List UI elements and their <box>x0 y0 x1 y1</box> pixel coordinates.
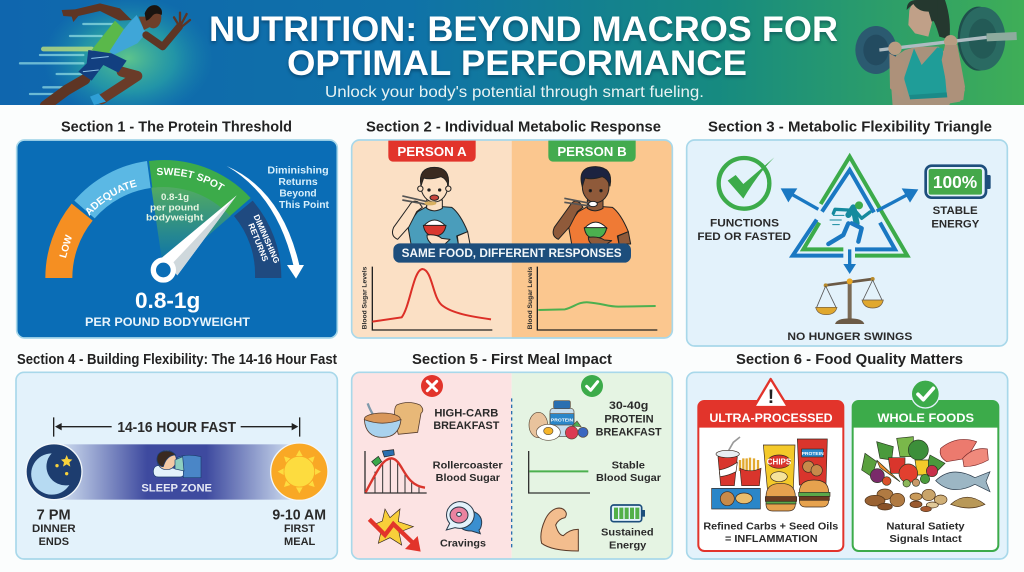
annotation: diminishing returns: Diminishing <box>267 165 329 176</box>
label: rollercoaster blood sugar: Blood Sugar <box>436 473 500 484</box>
chart: person A blood sugar spike: Blood Sugar Levels <box>362 266 369 329</box>
icon: vegetables <box>862 437 945 487</box>
icon: burgers <box>765 480 830 511</box>
label: protein breakfast <box>596 400 662 438</box>
label: stable blood sugar <box>596 460 661 484</box>
panel: protein threshold gauge <box>16 139 338 339</box>
label: protein breakfast: 30-40g <box>609 400 648 412</box>
icon: meat <box>940 439 988 467</box>
tag: person A: PERSON A <box>397 144 467 159</box>
figure: person A eating <box>392 167 470 244</box>
annotation: diminishing returns: Returns <box>278 177 318 188</box>
icon: moon <box>26 444 82 500</box>
icon: stable chart <box>529 451 590 493</box>
gauge needle <box>153 195 237 280</box>
panel: 14-16 hour fast timeline <box>16 372 337 559</box>
gauge segment: sweet spot: SWEET SPOT <box>156 168 225 190</box>
span arrow <box>54 417 300 437</box>
photo: sprinter <box>20 3 190 106</box>
tag: person B <box>548 141 636 162</box>
label: 7 PM dinner ends <box>32 508 76 548</box>
title: OPTIMAL PERFORMANCE <box>287 44 747 83</box>
card: ultra-processed: ULTRA-PROCESSED <box>709 411 833 425</box>
icon: warning triangle <box>754 379 788 408</box>
heading: section 3: Section 3 - Metabolic Flexibility Triangle <box>708 120 992 136</box>
label: refined carbs <box>703 521 839 545</box>
label: stable energy <box>931 205 980 230</box>
tag: person B: PERSON B <box>557 144 627 159</box>
icon: donut speech bubbles <box>446 502 482 534</box>
card: whole foods: WHOLE FOODS <box>877 411 974 425</box>
icon: soda and fries <box>716 437 761 486</box>
heading: section 2: Section 2 - Individual Metabolic Response <box>366 120 661 136</box>
label: natural satiety: Signals Intact <box>889 534 962 545</box>
label: high-carb breakfast: BREAKFAST <box>433 420 500 432</box>
gauge segment: diminishing returns: DIMINISHING <box>252 213 282 265</box>
header banner <box>0 0 1024 105</box>
icon: warning triangle: ! <box>768 387 774 408</box>
triangle with arrows <box>781 157 918 274</box>
sweet spot range text: 0.8-1g <box>161 192 189 202</box>
label: stable blood sugar: Blood Sugar <box>596 473 661 484</box>
icon: eggs protein jar berries: PROTEIN <box>551 418 573 424</box>
label: protein breakfast: BREAKFAST <box>596 426 662 438</box>
label: refined carbs: Refined Carbs + Seed Oils <box>703 521 839 532</box>
tag: person A <box>388 141 476 162</box>
chart: person A blood sugar spike <box>362 266 492 330</box>
icon: battery full <box>611 505 645 522</box>
label: natural satiety <box>886 521 965 545</box>
gauge inner sector <box>151 187 231 260</box>
heading: section 6: Section 6 - Food Quality Matters <box>736 352 963 368</box>
heading: section 5: Section 5 - First Meal Impact <box>412 352 612 368</box>
label: natural satiety: Natural Satiety <box>886 521 965 532</box>
label: 9-10 AM first meal: 9-10 AM <box>272 508 326 524</box>
label: stable energy: STABLE <box>933 205 978 217</box>
gauge segment: adequate <box>74 161 151 218</box>
icon: battery 100%: 100% <box>933 172 977 192</box>
label: 7 PM dinner ends: 7 PM <box>37 508 71 524</box>
icon: flexed arm <box>541 508 578 551</box>
label: sustained energy: Energy <box>609 540 647 551</box>
label: rollercoaster blood sugar <box>433 460 503 484</box>
banner: same food: SAME FOOD, DIFFERENT RESPONSES <box>402 246 622 260</box>
icon: battery 100% <box>926 166 991 198</box>
icon: crash arrow burst <box>369 509 421 552</box>
label: 9-10 AM first meal: MEAL <box>284 536 316 548</box>
photo: woman lifting barbell <box>855 0 1017 107</box>
label: sustained energy <box>601 527 654 551</box>
value: 0.8-1g: 0.8-1g <box>135 288 200 313</box>
sweet spot range text: per pound <box>150 202 199 212</box>
icon: cereal and toast <box>364 402 423 437</box>
icon: check circle <box>719 157 774 209</box>
chart: person B stable blood sugar: Blood Sugar Levels <box>527 266 534 329</box>
banner: same food <box>393 243 631 263</box>
icon: chips bag: CHIPS <box>767 458 792 467</box>
label: cravings: Cravings <box>440 538 486 549</box>
panel: food quality matters <box>687 372 1008 559</box>
gauge segment: diminishing returns: RETURNS <box>246 222 271 263</box>
icon: X badge <box>421 375 443 397</box>
heading: section 1: Section 1 - The Protein Threshold <box>61 120 292 136</box>
icon: snack bar <box>712 488 760 509</box>
label: 7 PM dinner ends: ENDS <box>39 536 69 548</box>
label: protein breakfast: PROTEIN <box>604 413 654 425</box>
gauge segment: low: LOW <box>58 233 75 259</box>
gauge segment: sweet spot <box>149 160 250 216</box>
panel: individual metabolic response <box>352 140 672 338</box>
figure: person B eating <box>553 167 631 244</box>
title <box>210 16 838 79</box>
label: 9-10 AM first meal <box>272 508 326 548</box>
icon: sun <box>271 443 328 500</box>
icon: fish <box>936 472 990 492</box>
gauge segment: adequate: ADEQUATE <box>86 180 137 216</box>
icon: sleeping person <box>153 450 201 478</box>
icon: nuts and seeds <box>865 489 985 512</box>
panel: metabolic flexibility triangle <box>687 140 1007 346</box>
title: NUTRITION: BEYOND MACROS FOR <box>209 10 838 49</box>
annotation: diminishing returns <box>267 165 330 211</box>
icon: runner <box>828 201 870 244</box>
label: stable energy: ENERGY <box>931 218 980 230</box>
label: 7 PM dinner ends: DINNER <box>32 523 76 535</box>
subtitle: Unlock your body's potential through smart fueling. <box>325 84 704 101</box>
card: whole foods <box>853 380 998 551</box>
sweet spot range text: bodyweight <box>146 213 203 223</box>
card: ultra-processed <box>698 379 843 551</box>
label: functions fed or fasted: FUNCTIONS <box>710 218 779 230</box>
sweet spot range text <box>146 192 203 223</box>
annotation: diminishing returns: This Point <box>279 200 330 211</box>
label: sustained energy: Sustained <box>601 527 654 538</box>
label: 14-16 hour fast: 14-16 HOUR FAST <box>117 420 236 436</box>
label: high-carb breakfast <box>433 407 500 432</box>
label: 9-10 AM first meal: FIRST <box>284 523 315 535</box>
curved arrow <box>227 166 304 279</box>
heading: section 4: Section 4 - Building Flexibility: The 14-16 Hour Fast <box>17 352 337 368</box>
label: sleep zone: SLEEP ZONE <box>141 482 212 494</box>
annotation: diminishing returns: Beyond <box>279 188 317 199</box>
icon: balance scale <box>816 277 883 324</box>
icon: check circle <box>911 380 939 408</box>
panel: first meal impact <box>352 372 672 559</box>
label: no hunger swings: NO HUNGER SWINGS <box>787 331 912 343</box>
label: functions fed or fasted: FED OR FASTED <box>697 231 791 243</box>
label: high-carb breakfast: HIGH-CARB <box>434 407 498 419</box>
icon: protein bag <box>797 439 827 485</box>
icon: check badge <box>581 375 603 397</box>
icon: eggs protein jar berries <box>529 401 588 440</box>
icon: protein bag: PROTEIN <box>802 451 824 457</box>
bar: sleep zone <box>53 444 300 500</box>
label: refined carbs: = INFLAMMATION <box>725 534 818 545</box>
chart: person B stable blood sugar <box>527 266 657 330</box>
label: functions fed or fasted <box>697 218 791 243</box>
value caption: PER POUND BODYWEIGHT <box>85 316 250 329</box>
gauge segment: low <box>45 204 93 278</box>
icon: chips bag <box>763 445 795 488</box>
icon: rollercoaster <box>365 450 427 493</box>
label: rollercoaster blood sugar: Rollercoaster <box>433 460 503 471</box>
label: stable blood sugar: Stable <box>612 460 645 471</box>
gauge segment: diminishing returns <box>234 201 282 278</box>
